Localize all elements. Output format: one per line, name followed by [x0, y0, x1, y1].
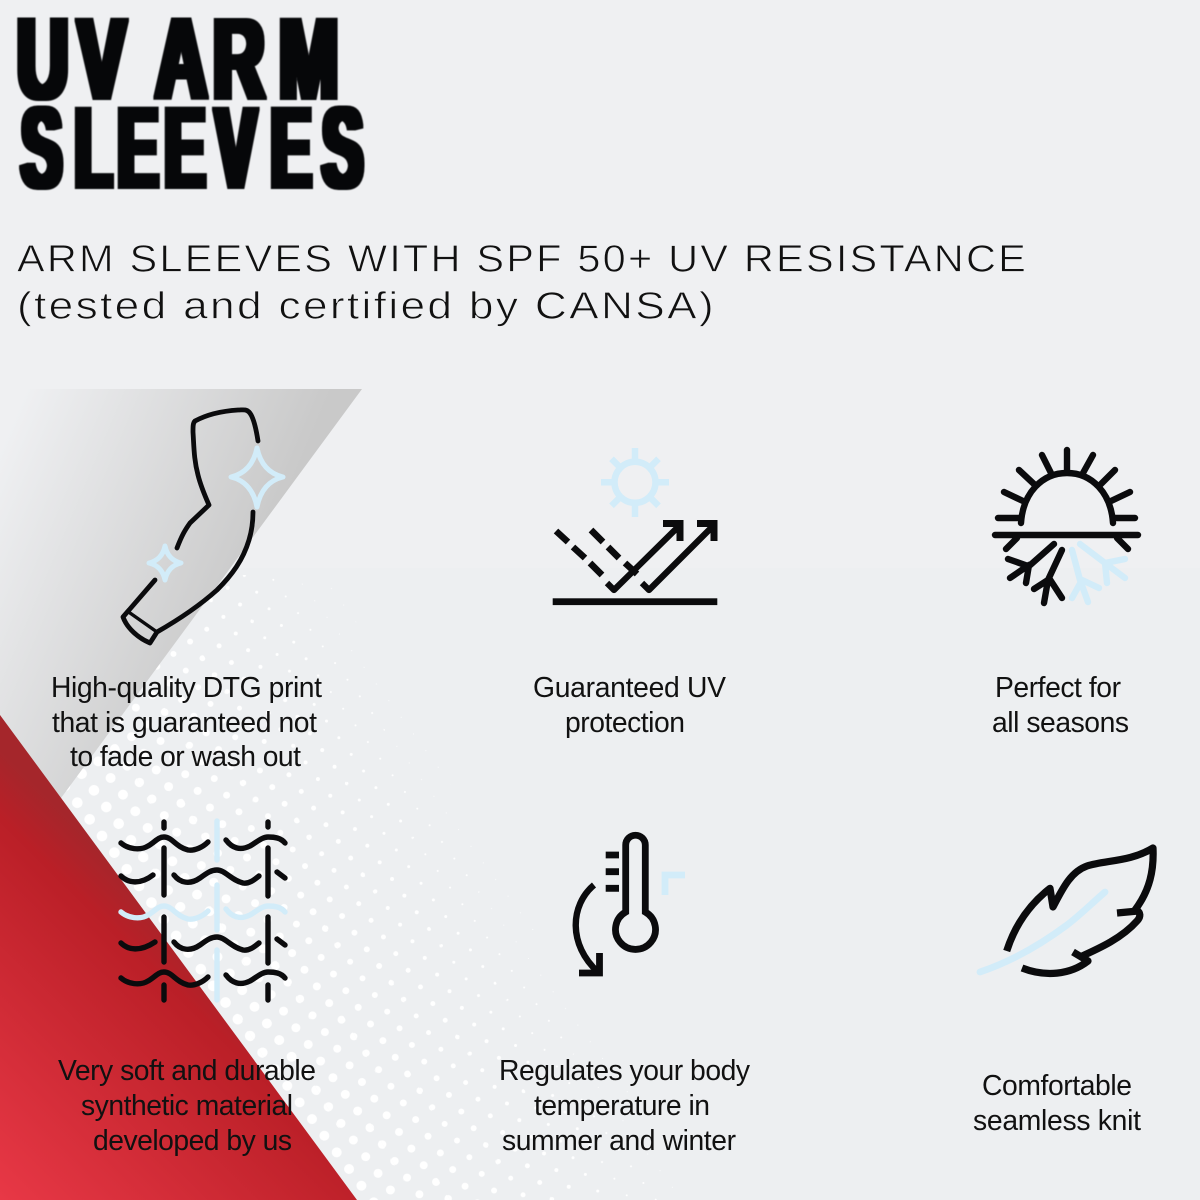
icon: feather — [980, 848, 1153, 973]
caption: UV protection: Guaranteed UV — [533, 671, 726, 703]
caption: soft and durable: Very soft and durable — [58, 1054, 316, 1086]
caption: all seasons: Perfect for — [995, 671, 1121, 703]
caption: DTG print: to fade or wash out — [70, 740, 301, 772]
title: SLEEVES — [21, 84, 363, 212]
caption: DTG print: that is guaranteed not — [52, 706, 317, 738]
caption: DTG print: High-quality DTG print — [51, 671, 322, 703]
caption: soft and durable — [58, 1054, 316, 1156]
caption: soft and durable: developed by us — [93, 1124, 292, 1156]
caption: seamless knit — [973, 1069, 1141, 1136]
ground line — [553, 598, 717, 605]
reflected arrows — [607, 525, 680, 590]
icon: sun over snowflake, all seasons — [995, 450, 1138, 603]
caption: soft and durable: synthetic material — [81, 1089, 293, 1121]
icon: UV reflection with sun — [553, 448, 717, 605]
halftone dot background — [0, 575, 691, 1200]
title — [17, 0, 363, 212]
red gradient triangle — [0, 715, 357, 1200]
icon: woven fabric — [121, 821, 285, 1000]
icon: thermometer — [576, 835, 685, 973]
caption: UV protection: protection — [565, 706, 685, 738]
grey gradient triangle — [0, 389, 362, 881]
caption: seamless knit: seamless knit — [973, 1104, 1141, 1136]
caption: seamless knit: Comfortable — [982, 1069, 1132, 1101]
icon: large sparkle — [231, 448, 283, 507]
caption: regulates temperature: Regulates your body — [499, 1054, 751, 1086]
icon: small sparkle — [149, 546, 181, 580]
incoming dashed rays — [556, 530, 637, 575]
subtitle: (tested and certified by CANSA) — [17, 285, 716, 327]
subtitle — [17, 239, 1028, 327]
caption: regulates temperature: summer and winter — [502, 1124, 736, 1156]
sun — [601, 448, 669, 517]
caption: UV protection — [533, 671, 726, 738]
caption: regulates temperature — [499, 1054, 751, 1156]
icon: arm sleeve with sparkles — [123, 410, 283, 643]
subtitle: ARM SLEEVES WITH SPF 50+ UV RESISTANCE — [17, 239, 1028, 281]
caption: regulates temperature: temperature in — [534, 1089, 710, 1121]
caption: all seasons — [992, 671, 1129, 738]
caption: DTG print — [51, 671, 322, 772]
caption: all seasons: all seasons — [992, 706, 1129, 738]
